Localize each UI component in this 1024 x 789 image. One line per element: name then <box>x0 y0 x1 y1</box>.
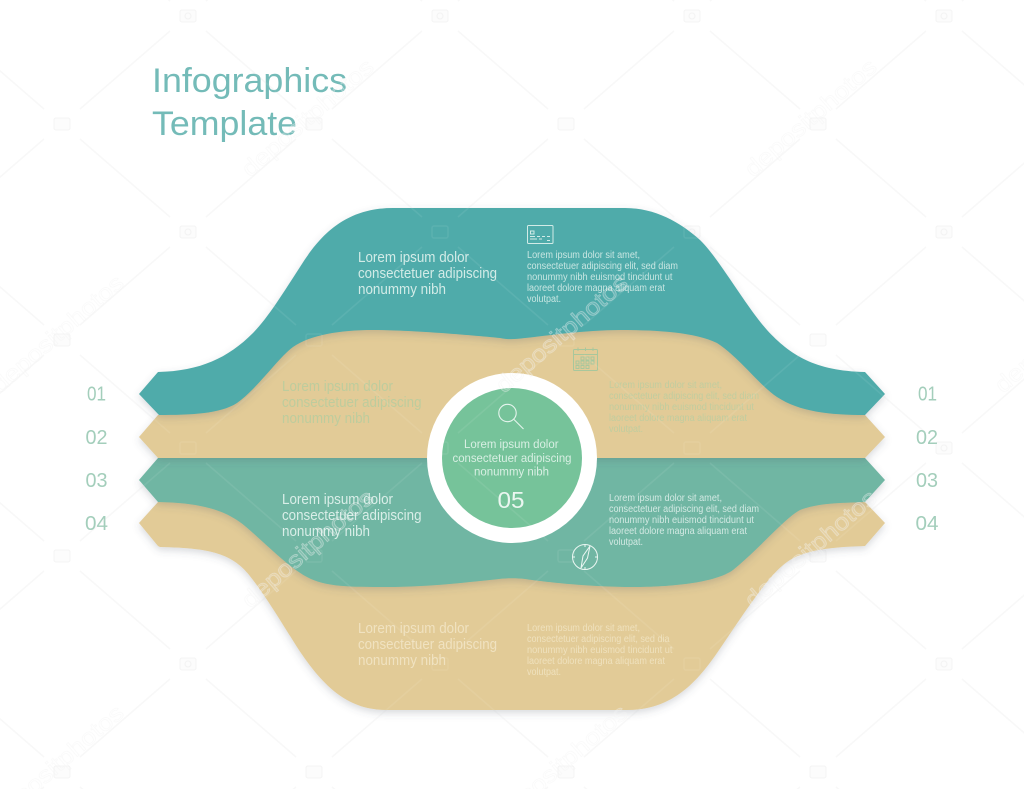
text block 01 heading: nonummy nibh <box>358 282 446 298</box>
text block 01 heading: consectetuer adipiscing <box>358 266 497 282</box>
text block 01 heading <box>358 250 497 298</box>
band 04: lower tan shape <box>139 502 885 710</box>
text block 04 heading: Lorem ipsum dolor <box>358 621 469 637</box>
right step numbers: 01 <box>918 384 937 406</box>
text block 03 body <box>609 493 759 548</box>
text block 02 body: volutpat. <box>609 424 643 435</box>
watermark: depositphotos <box>739 53 882 182</box>
text block 02 heading: nonummy nibh <box>282 411 370 427</box>
title: Template <box>152 105 297 143</box>
watermark: depositphotos <box>236 53 379 182</box>
icon: calendar <box>574 348 598 370</box>
text block 03 body: volutpat. <box>609 537 643 548</box>
text block 04 body: Lorem ipsum dolor sit amet, <box>527 623 640 634</box>
text block 02 heading <box>282 379 422 427</box>
left step numbers: 03 <box>86 470 108 492</box>
text block 04 heading: nonummy nibh <box>358 653 446 669</box>
text block 02 body: laoreet dolore magna aliquam erat <box>609 413 747 424</box>
text block 03 body: Lorem ipsum dolor sit amet, <box>609 493 722 504</box>
icon: magnifier <box>499 404 524 429</box>
watermark: depositphotos <box>490 269 633 398</box>
text block 01 body <box>527 250 678 305</box>
text block 04 body: nonummy nibh euismod tincidunt ut <box>527 645 673 656</box>
icon: compass <box>572 544 598 570</box>
text block 04 heading <box>358 621 497 669</box>
center text <box>452 437 572 478</box>
band 03: green shape <box>139 458 885 587</box>
text block 03 heading: Lorem ipsum dolor <box>282 492 393 508</box>
text block 01 body: laoreet dolore magna aliquam erat <box>527 283 665 294</box>
center text: nonummy nibh <box>474 464 549 478</box>
text block 04 body: volutpat. <box>527 667 561 678</box>
text block 01 body: volutpat. <box>527 294 561 305</box>
text block 02 body: nonummy nibh euismod tincidunt ut <box>609 402 754 413</box>
text block 02 body: consectetuer adipiscing elit, sed diam <box>609 391 759 402</box>
text block 02 body <box>609 380 759 435</box>
text block 01 body: nonummy nibh euismod tincidunt ut <box>527 272 673 283</box>
text block 02 heading: Lorem ipsum dolor <box>282 379 393 395</box>
title: Infographics <box>152 62 347 100</box>
band 01: teal shape <box>139 208 885 415</box>
text block 04 body <box>527 623 673 678</box>
text block 03 body: laoreet dolore magna aliquam erat <box>609 526 747 537</box>
band 02: upper tan shape <box>139 320 885 458</box>
text block 04 heading: consectetuer adipiscing <box>358 637 497 653</box>
right step numbers: 02 <box>916 427 938 449</box>
left step numbers: 01 <box>87 384 106 406</box>
text block 01 body: Lorem ipsum dolor sit amet, <box>527 250 640 261</box>
text block 01 body: consectetuer adipiscing elit, sed diam <box>527 261 678 272</box>
text block 03 heading <box>282 492 422 540</box>
center text: Lorem ipsum dolor <box>464 437 558 451</box>
right step numbers <box>916 384 938 535</box>
watermark: depositphotos <box>236 484 379 613</box>
text block 03 heading: nonummy nibh <box>282 524 370 540</box>
text block 04 body: laoreet dolore magna aliquam erat <box>527 656 665 667</box>
center text: consectetuer adipiscing <box>452 451 572 465</box>
icon: credit card <box>528 226 553 244</box>
text block 02 heading: consectetuer adipiscing <box>282 395 422 411</box>
text block 03 body: consectetuer adipiscing elit, sed diam <box>609 504 759 515</box>
watermark: depositphotos <box>739 484 882 613</box>
right step numbers: 04 <box>916 513 938 535</box>
text block 01 heading: Lorem ipsum dolor <box>358 250 469 266</box>
text block 04 body: consectetuer adipiscing elit, sed dia <box>527 634 670 645</box>
text block 03 heading: consectetuer adipiscing <box>282 508 422 524</box>
left step numbers: 04 <box>85 513 108 535</box>
text block 03 body: nonummy nibh euismod tincidunt ut <box>609 515 754 526</box>
center number: 05 <box>498 487 524 513</box>
left step numbers <box>85 384 108 535</box>
text block 02 body: Lorem ipsum dolor sit amet, <box>609 380 722 391</box>
left step numbers: 02 <box>86 427 108 449</box>
title <box>152 62 347 143</box>
right step numbers: 03 <box>916 470 938 492</box>
center circle 05 <box>427 373 597 543</box>
